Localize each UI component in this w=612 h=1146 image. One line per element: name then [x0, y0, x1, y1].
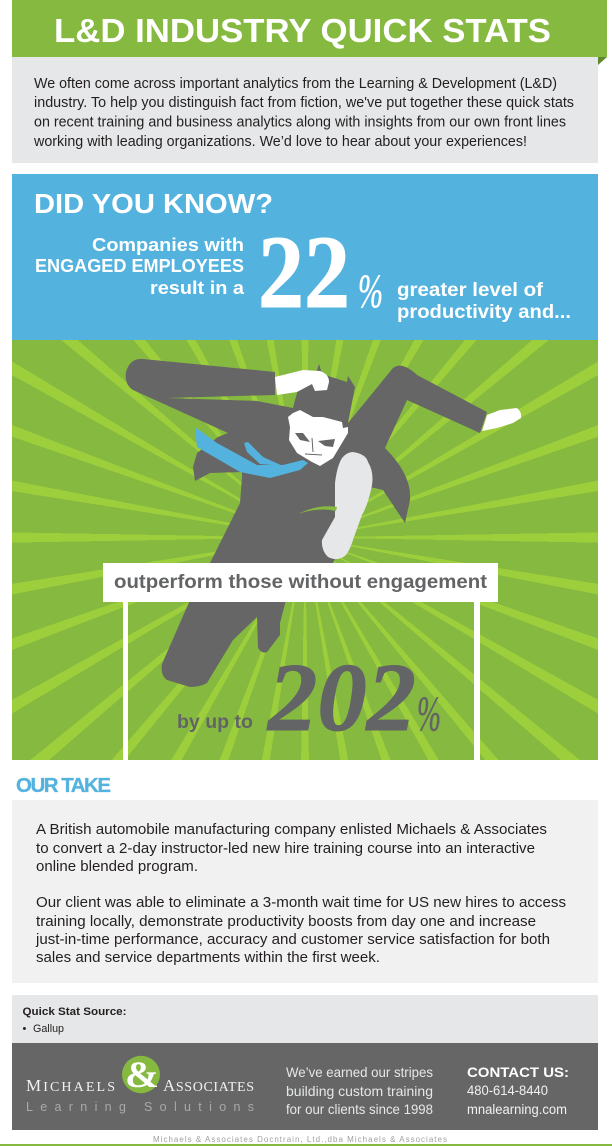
icon: leaping businessman [126, 359, 521, 687]
jacket and arms [126, 359, 487, 563]
text: stripes tagline [286, 1064, 433, 1117]
paragraph: results: training locally, demonstrate productivity boosts from day one and increase [36, 914, 536, 930]
hand: raised on head [275, 370, 329, 395]
text: companies with engaged employees: result in a [150, 278, 245, 298]
text: companies with engaged employees [35, 235, 245, 298]
bottom green rule [0, 1144, 612, 1146]
paragraph: results: Our client was able to eliminate a 3-month wait time for US new hires to access [36, 895, 566, 911]
panel: introduction: We often come across important analytics from the Learning & Development (L&D) [34, 76, 557, 92]
paragraph: case study: A British automobile manufacturing company enlisted Michaels & Associates [36, 822, 547, 838]
necktie tail [244, 442, 283, 466]
text: greater level of productivity [397, 280, 571, 323]
panel: quick stat source: Quick Stat Source: [22, 1006, 126, 1018]
panel: sunburst illustration [12, 340, 598, 760]
panel: did you know [12, 174, 598, 340]
paragraph: case study [36, 822, 547, 875]
text: stripes tagline: for our clients since 1998 [286, 1101, 433, 1117]
text: greater level of productivity: productivity and... [397, 302, 571, 323]
hand: outstretched [482, 408, 521, 431]
heading: did you know: DID YOU KNOW? [34, 188, 273, 219]
heading: our take: OUR TAKE [16, 774, 111, 797]
text: legal line: Michaels & Associates Docntrain, Ltd.,dba Michaels & Associates [153, 1135, 447, 1144]
panel: introduction: on recent training and business analytics along with insights from our own front lines [34, 114, 566, 130]
paragraph: case study: to convert a 2-day instructor-led new hire training course into an interactive [36, 841, 535, 857]
logo: michaels and associates: & [125, 1055, 159, 1096]
logo: michaels and associates: Learning Solutions [26, 1100, 254, 1114]
logo: michaels and associates: ASSOCIATES [163, 1076, 254, 1095]
lower leg [162, 600, 286, 687]
paragraph: results: just-in-time performance, accuracy and customer service satisfaction for both [35, 932, 550, 948]
jacket crease [298, 506, 337, 514]
hurdle label: outperform: outperform those without engagement [114, 572, 488, 593]
panel: quick stat source: • [22, 1023, 26, 1035]
hurdle label: outperform [103, 563, 498, 602]
paragraph: case study: online blended program. [36, 859, 198, 875]
sunburst rays [12, 340, 598, 760]
face [288, 410, 348, 466]
panel: footer [12, 1043, 598, 1130]
panel: introduction: working with leading organizations. We’d love to hear about your experiences! [33, 134, 527, 150]
shoe sole [322, 452, 372, 559]
stat: 22 percent: % [358, 265, 383, 318]
text: stripes tagline: building custom training [286, 1083, 433, 1099]
necktie [195, 427, 308, 478]
text: stripes tagline: We’ve earned our stripes [286, 1064, 433, 1080]
text: contact: CONTACT US: [467, 1064, 569, 1080]
logo: michaels and associates [26, 1055, 254, 1114]
header banner [12, 0, 607, 65]
logo: michaels and associates: MICHAELS [26, 1076, 115, 1095]
stat: by up to 202 percent: by up to [177, 712, 253, 733]
stat: by up to 202 percent: 202 [266, 644, 416, 752]
paragraph: results: sales and service departments within the first week. [36, 950, 380, 966]
panel: quick stat source: Gallup [33, 1023, 64, 1035]
text: contact: mnalearning.com [467, 1102, 567, 1117]
stat: 22 percent: 22 [258, 215, 350, 330]
title: L&D INDUSTRY QUICK STATS [54, 12, 551, 49]
panel: our take [12, 800, 598, 983]
panel: introduction: industry. To help you distinguish fact from fiction, we've put together these quick stats [34, 95, 574, 111]
panel: introduction [12, 57, 598, 163]
text: companies with engaged employees: Companies with [92, 235, 244, 255]
stat: by up to 202 percent: % [417, 685, 441, 741]
text: contact: 480-614-8440 [467, 1083, 548, 1098]
text: companies with engaged employees: ENGAGED EMPLOYEES [35, 256, 244, 276]
hurdle [103, 563, 498, 760]
paragraph: results [35, 895, 566, 966]
panel: quick stat source [12, 995, 598, 1043]
text: greater level of productivity: greater level of [397, 280, 544, 301]
text: contact [467, 1064, 569, 1117]
stat: by up to 202 percent [177, 644, 441, 752]
